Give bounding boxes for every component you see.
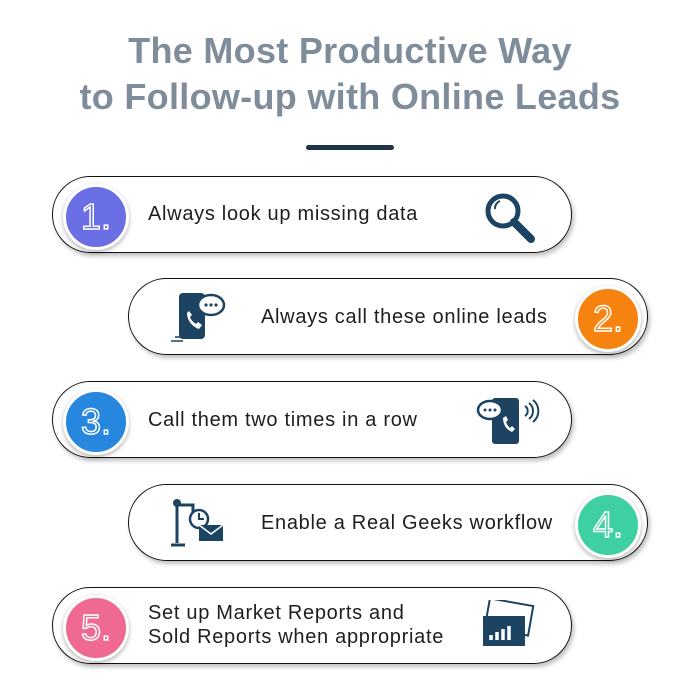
panel: step 4 bbox=[128, 484, 648, 561]
text 5: Sold Reports when appropriate bbox=[148, 626, 444, 648]
number 5 bbox=[63, 595, 129, 661]
text 5: Set up Market Reports and bbox=[148, 602, 405, 624]
title: to Follow-up with Online Leads bbox=[80, 76, 620, 117]
number 3 bbox=[63, 389, 129, 455]
divider bbox=[306, 145, 394, 150]
text 2: Always call these online leads bbox=[261, 306, 548, 328]
icon: phone chat bbox=[171, 293, 226, 342]
number 1 bbox=[63, 184, 129, 250]
number 4 bbox=[575, 492, 641, 558]
icon: reports chart bbox=[483, 600, 534, 646]
title bbox=[80, 30, 620, 117]
icon: phone ringing bbox=[476, 398, 540, 444]
text 3: Call them two times in a row bbox=[148, 409, 418, 431]
icon: magnifier bbox=[486, 194, 535, 243]
text 4: Enable a Real Geeks workflow bbox=[261, 512, 553, 534]
number 2 bbox=[575, 286, 641, 352]
text 1: Always look up missing data bbox=[148, 203, 418, 225]
panel: step 1 bbox=[52, 176, 572, 253]
panel: step 5 bbox=[52, 587, 572, 664]
panel: step 3 bbox=[52, 381, 572, 458]
title: The Most Productive Way bbox=[128, 30, 572, 71]
icon: workflow bbox=[171, 499, 223, 546]
text 5 bbox=[148, 602, 444, 648]
panel: step 2 bbox=[128, 278, 648, 355]
